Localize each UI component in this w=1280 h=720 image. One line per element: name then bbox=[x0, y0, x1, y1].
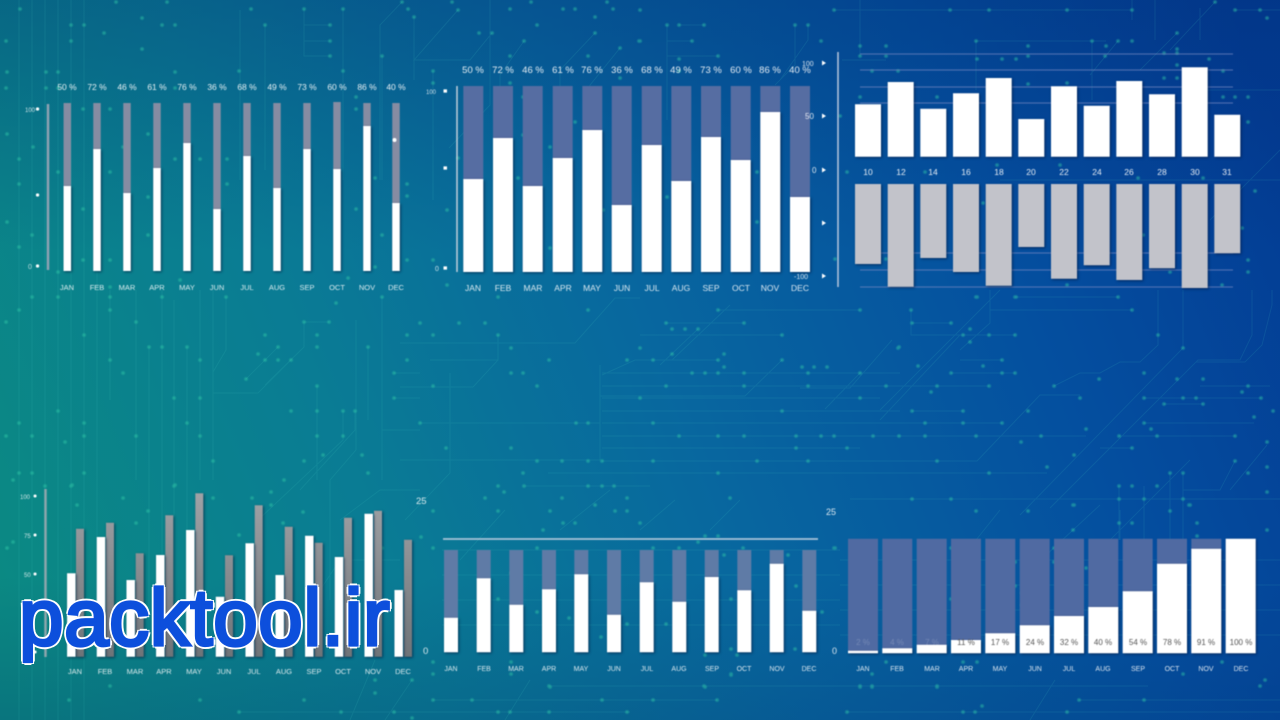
background tracks bbox=[863, 539, 1241, 653]
percentage labels: 68 % bbox=[237, 82, 257, 92]
date labels: 18 bbox=[994, 167, 1004, 177]
percentage labels: 40 % bbox=[1094, 638, 1112, 647]
month labels: JAN bbox=[60, 283, 74, 292]
date labels: 12 bbox=[896, 167, 906, 177]
month labels: SEP bbox=[299, 283, 315, 292]
percentage labels: 91 % bbox=[1197, 638, 1215, 647]
scale labels bbox=[416, 496, 428, 657]
month labels: AUG bbox=[671, 666, 687, 673]
month labels: MAR bbox=[508, 666, 524, 673]
axis with value labels bbox=[794, 52, 838, 287]
month labels: JUN bbox=[217, 667, 231, 676]
percentage labels: 54 % bbox=[1129, 638, 1147, 647]
date labels: 28 bbox=[1157, 167, 1167, 177]
axis with value labels: -100 bbox=[794, 274, 808, 281]
date labels: 22 bbox=[1059, 167, 1069, 177]
month labels bbox=[465, 283, 809, 293]
month labels: APR bbox=[554, 283, 572, 293]
month labels: DEC bbox=[802, 666, 816, 673]
percentage labels: 46 % bbox=[522, 65, 544, 76]
month labels: MAY bbox=[179, 283, 195, 292]
background tracks bbox=[451, 550, 809, 652]
percentage labels bbox=[856, 638, 1252, 647]
white value bars bbox=[473, 112, 800, 272]
month labels bbox=[856, 666, 1248, 673]
white value bars bbox=[67, 126, 396, 271]
percentage labels: 73 % bbox=[297, 82, 317, 92]
percentage labels: 50 % bbox=[462, 65, 484, 76]
month labels: NOV bbox=[365, 667, 381, 676]
month labels: FEB bbox=[495, 283, 512, 293]
month labels: DEC bbox=[1234, 666, 1248, 673]
percentage labels: 24 % bbox=[1026, 638, 1044, 647]
percentage labels: 4 % bbox=[890, 638, 904, 647]
percentage labels: 46 % bbox=[117, 82, 137, 92]
month labels: NOV bbox=[769, 666, 785, 673]
axis: 100 bbox=[25, 108, 36, 114]
background tracks bbox=[67, 102, 396, 271]
month labels: JUL bbox=[641, 666, 653, 673]
month labels: SEP bbox=[1131, 666, 1145, 673]
dot marker bbox=[392, 138, 396, 142]
grey bars bbox=[80, 493, 408, 657]
percentage labels: 36 % bbox=[611, 65, 633, 76]
percentage labels: 72 % bbox=[492, 65, 514, 76]
month labels: JAN bbox=[465, 283, 481, 293]
axis: 0 bbox=[28, 264, 32, 271]
chart: slim monthly bars, top left bbox=[25, 82, 406, 292]
percentage labels: 61 % bbox=[147, 82, 167, 92]
date labels bbox=[863, 167, 1232, 177]
month labels: NOV bbox=[359, 283, 375, 292]
month labels: FEB bbox=[98, 667, 112, 676]
date labels: 14 bbox=[928, 167, 938, 177]
month labels: DEC bbox=[388, 283, 404, 292]
axis with value labels: 50 bbox=[805, 112, 814, 121]
month labels: JUN bbox=[607, 666, 621, 673]
month labels: APR bbox=[959, 666, 973, 673]
chart: medium bars, bottom centre bbox=[443, 507, 837, 673]
date labels: 31 bbox=[1222, 167, 1232, 177]
percentage labels: 73 % bbox=[700, 65, 722, 76]
month labels: OCT bbox=[737, 666, 752, 673]
axis with value labels: 0 bbox=[812, 166, 817, 175]
month labels: MAR bbox=[924, 666, 940, 673]
month labels: APR bbox=[542, 666, 556, 673]
white value bars bbox=[863, 539, 1241, 653]
month labels: APR bbox=[156, 667, 172, 676]
month labels: JAN bbox=[68, 667, 82, 676]
percentage labels: 40 % bbox=[386, 82, 406, 92]
scale labels: 0 bbox=[832, 646, 837, 656]
upper white bars bbox=[868, 67, 1227, 157]
percentage labels bbox=[462, 65, 811, 76]
date labels: 26 bbox=[1124, 167, 1134, 177]
white value bars bbox=[451, 564, 809, 652]
month labels: AUG bbox=[1095, 666, 1111, 673]
white bars bbox=[71, 514, 399, 657]
scale labels: 25 bbox=[826, 507, 836, 517]
month labels: SEP bbox=[702, 283, 720, 293]
axis: 75 bbox=[24, 534, 31, 540]
month labels bbox=[444, 666, 816, 673]
month labels: NOV bbox=[1198, 666, 1214, 673]
month labels: SEP bbox=[306, 667, 322, 676]
axis: 0 bbox=[435, 266, 439, 273]
percentage labels: 86 % bbox=[759, 65, 781, 76]
axis: 100 bbox=[20, 495, 31, 501]
percentage labels: 7 % bbox=[925, 638, 939, 647]
percentage labels: 49 % bbox=[267, 82, 287, 92]
percentage labels: 2 % bbox=[856, 638, 870, 647]
percentage labels: 49 % bbox=[670, 65, 692, 76]
scale labels: 25 bbox=[416, 496, 427, 507]
lower grey bars bbox=[868, 184, 1227, 288]
month labels: DEC bbox=[791, 283, 809, 293]
percentage labels: 60 % bbox=[730, 65, 752, 76]
month labels: MAY bbox=[186, 667, 202, 676]
month labels: JUL bbox=[240, 283, 254, 292]
date labels: 30 bbox=[1190, 167, 1200, 177]
month labels: MAY bbox=[574, 666, 589, 673]
percentage labels: 40 % bbox=[789, 65, 811, 76]
percentage labels: 50 % bbox=[57, 82, 77, 92]
percentage labels: 76 % bbox=[177, 82, 197, 92]
chart: diverging bars, top right bbox=[794, 52, 1233, 288]
axis bbox=[426, 86, 457, 273]
month labels: MAR bbox=[127, 667, 144, 676]
month labels: MAY bbox=[583, 283, 601, 293]
watermark: packtool.ir bbox=[19, 573, 390, 662]
chart: wide monthly bars, top centre bbox=[426, 65, 811, 293]
month labels: SEP bbox=[705, 666, 719, 673]
chart: cumulative bars, bottom right bbox=[856, 539, 1252, 673]
month labels: OCT bbox=[335, 667, 351, 676]
month labels: MAR bbox=[119, 283, 136, 292]
month labels: JUN bbox=[1028, 666, 1042, 673]
percentage labels: 60 % bbox=[327, 82, 347, 92]
axis: 50 bbox=[24, 573, 31, 579]
month labels: JUL bbox=[247, 667, 261, 676]
percentage labels: 68 % bbox=[641, 65, 663, 76]
month labels: MAR bbox=[524, 283, 542, 293]
month labels: DEC bbox=[395, 667, 411, 676]
axis: 100 bbox=[426, 90, 437, 96]
month labels: AUG bbox=[672, 283, 690, 293]
month labels: OCT bbox=[1165, 666, 1180, 673]
month labels: MAY bbox=[993, 666, 1008, 673]
axis: 0 bbox=[28, 651, 32, 657]
month labels: APR bbox=[149, 283, 165, 292]
month labels: FEB bbox=[477, 666, 491, 673]
month labels: JUL bbox=[1063, 666, 1075, 673]
percentage labels: 100 % bbox=[1230, 638, 1252, 647]
percentage labels: 17 % bbox=[991, 638, 1009, 647]
month labels: FEB bbox=[90, 283, 104, 292]
percentage labels: 72 % bbox=[87, 82, 107, 92]
percentage labels: 11 % bbox=[957, 638, 975, 647]
month labels: AUG bbox=[269, 283, 285, 292]
chart: paired bars, bottom left bbox=[20, 489, 428, 676]
background tracks bbox=[473, 86, 800, 272]
percentage labels: 78 % bbox=[1163, 638, 1181, 647]
percentage labels: 61 % bbox=[552, 65, 574, 76]
date labels: 16 bbox=[961, 167, 971, 177]
date labels: 10 bbox=[863, 167, 873, 177]
percentage labels bbox=[57, 82, 406, 92]
month labels bbox=[60, 283, 404, 292]
month labels: JAN bbox=[856, 666, 870, 673]
month labels: JAN bbox=[444, 666, 458, 673]
percentage labels: 86 % bbox=[357, 82, 377, 92]
month labels bbox=[68, 667, 411, 676]
month labels: OCT bbox=[329, 283, 345, 292]
month labels: FEB bbox=[890, 666, 904, 673]
scale labels: 0 bbox=[423, 646, 428, 657]
month labels: JUN bbox=[210, 283, 224, 292]
month labels: AUG bbox=[276, 667, 292, 676]
axis with value labels: 100 bbox=[802, 61, 814, 68]
date labels: 20 bbox=[1026, 167, 1036, 177]
top rule bbox=[443, 538, 818, 540]
percentage labels: 76 % bbox=[581, 65, 603, 76]
date labels: 24 bbox=[1092, 167, 1102, 177]
month labels: NOV bbox=[761, 283, 780, 293]
percentage labels: 36 % bbox=[207, 82, 227, 92]
month labels: JUN bbox=[614, 283, 630, 293]
axis bbox=[25, 104, 48, 271]
month labels: OCT bbox=[732, 283, 750, 293]
month labels: JUL bbox=[644, 283, 660, 293]
percentage labels: 32 % bbox=[1060, 638, 1078, 647]
scale labels bbox=[826, 507, 837, 656]
axis bbox=[20, 489, 46, 657]
